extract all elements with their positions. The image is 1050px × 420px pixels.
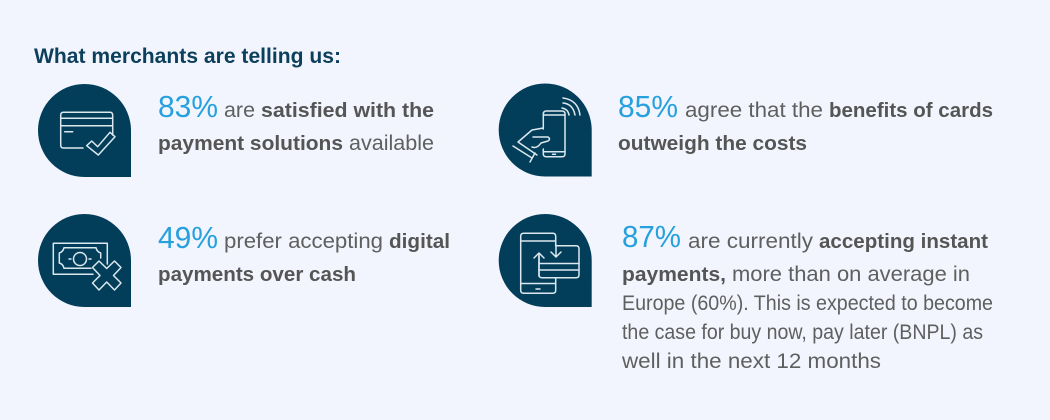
text: 85% benefits outweigh costs bbox=[618, 89, 993, 155]
panel: benefits of cards stat bbox=[499, 84, 993, 176]
text: 83% satisfied bbox=[158, 89, 434, 155]
text: 85% benefits outweigh costs: agree that the bbox=[685, 99, 823, 122]
text: 87% accepting instant payments: well in the next 12 months bbox=[621, 350, 881, 373]
text: 83% satisfied: are bbox=[224, 99, 255, 122]
text: 85% benefits outweigh costs: 85% bbox=[618, 89, 678, 124]
panel: card satisfaction stat bbox=[38, 84, 434, 177]
text: 87% accepting instant payments: the case for buy now, pay later (BNPL) as bbox=[622, 321, 983, 344]
text: 87% accepting instant payments: Europe (60%). This is expected to become bbox=[622, 292, 993, 315]
text: 87% accepting instant payments: 87% bbox=[622, 219, 681, 254]
panel: instant payments stat bbox=[499, 214, 993, 373]
text: 49% prefer digital bbox=[158, 220, 450, 286]
text: 87% accepting instant payments bbox=[621, 219, 993, 373]
text: 49% prefer digital: payments over cash bbox=[158, 264, 356, 286]
text: 83% satisfied: satisfied with the bbox=[261, 100, 434, 122]
text: 49% prefer digital: 49% bbox=[158, 220, 218, 255]
text: 85% benefits outweigh costs: benefits of cards bbox=[829, 100, 993, 122]
icon: phone and card exchange bbox=[499, 214, 592, 307]
icon: hand holding phone with signal bbox=[499, 84, 592, 176]
icon: credit card with check mark bbox=[38, 84, 131, 177]
icon: banknote with cross bbox=[38, 214, 131, 307]
text: 87% accepting instant payments: are currently bbox=[688, 230, 814, 253]
text: 49% prefer digital: digital bbox=[389, 231, 450, 253]
panel: digital over cash stat bbox=[38, 214, 450, 307]
text: 87% accepting instant payments: accepting instant bbox=[819, 231, 988, 253]
text: 83% satisfied: available bbox=[349, 132, 434, 155]
text: 49% prefer digital: prefer accepting bbox=[224, 230, 383, 253]
text: 87% accepting instant payments: more than on average in bbox=[732, 263, 970, 286]
text: 87% accepting instant payments: payments, bbox=[622, 264, 726, 286]
text: 83% satisfied: payment solutions bbox=[158, 133, 343, 155]
text: 83% satisfied: 83% bbox=[158, 89, 218, 124]
text: 85% benefits outweigh costs: outweigh the costs bbox=[618, 133, 807, 155]
title: What merchants are telling us: bbox=[34, 45, 341, 68]
